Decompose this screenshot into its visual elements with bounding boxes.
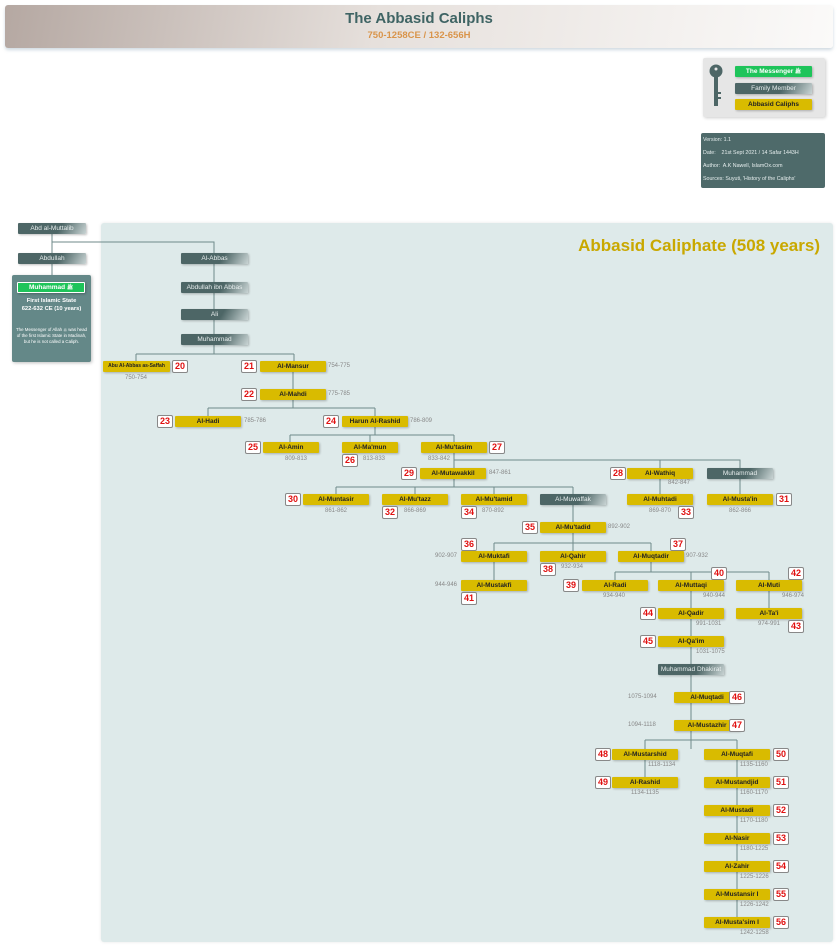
- reign dates: 870-892: [482, 508, 504, 514]
- node: Ali: [181, 309, 248, 320]
- reign dates: 1225-1226: [740, 874, 769, 880]
- reign dates: 934-940: [603, 593, 625, 599]
- number badges: 28: [613, 468, 623, 478]
- caliph boxes: Harun Al-Rashid: [350, 418, 400, 425]
- text: note: The Messenger of Allah ﷺ was head of the first Islamic State in Madinah, but he is not called a Caliph.: [16, 327, 87, 344]
- reign dates: 1160-1170: [740, 790, 768, 796]
- number badges: 21: [244, 361, 254, 371]
- node: Al-Abbas: Al-Abbas: [201, 255, 228, 262]
- reign dates: 786-809: [410, 418, 432, 424]
- legend: messenger: [735, 66, 812, 77]
- number badges: 33: [681, 507, 691, 517]
- reign dates: 946-974: [782, 593, 804, 599]
- legend: family member: Family Member: [751, 85, 796, 92]
- reign dates: 869-870: [649, 508, 671, 514]
- number badges: 24: [326, 416, 336, 426]
- reign dates: 842-847: [668, 480, 690, 486]
- reign dates: 940-944: [703, 593, 725, 599]
- caliph boxes: Al-Mustandjid: [716, 779, 758, 786]
- number badges: 40: [714, 568, 724, 578]
- node: Muhammad: Muhammad: [197, 336, 232, 343]
- caliph boxes: Al-Mansur: [277, 363, 309, 370]
- reign dates: 892-902: [608, 524, 630, 530]
- number badges: 38: [543, 564, 553, 574]
- info box: [701, 133, 825, 188]
- panel: abbasid caliphate: [101, 223, 833, 942]
- reign dates: 750-754: [125, 375, 147, 381]
- caliph boxes: Al-Nasir: [725, 835, 749, 842]
- node: Muhammad (2): [707, 468, 773, 479]
- node: Muhammad: Muhammad ﷺ: [29, 284, 73, 291]
- node: Al-Muwaffak: [540, 494, 606, 505]
- title: The Abbasid Caliphs: [345, 10, 493, 27]
- caliph boxes: Al-Muntasir: [318, 496, 354, 503]
- reign dates: 847-861: [489, 470, 511, 476]
- node: Muhammad Dhakirat: Muhammad Dhakirat: [661, 666, 721, 673]
- caliph boxes: Al-Musta'sim I: [715, 919, 759, 926]
- caliph boxes: Al-Mutawakkil: [431, 470, 475, 477]
- reign dates: 754-775: [328, 363, 350, 369]
- caliph boxes: Al-Mu'tazz: [399, 496, 431, 503]
- subtitle: 750-1258CE / 132-656H: [368, 30, 470, 41]
- caliph boxes: Al-Radi: [604, 582, 626, 589]
- legend: caliphs: [735, 99, 812, 110]
- caliph boxes: Al-Hadi: [197, 418, 219, 425]
- caliph boxes: Al-Muhtadi: [643, 496, 677, 503]
- text: first islamic state: 622-632 CE (10 years): [22, 306, 81, 312]
- number badges: 56: [776, 917, 786, 927]
- legend: family member: [735, 83, 812, 94]
- caliph boxes: Al-Qadir: [678, 610, 704, 617]
- number badges: 30: [288, 494, 298, 504]
- number badges: 34: [464, 507, 474, 517]
- reign dates: 785-786: [244, 418, 266, 424]
- caliph boxes: Al-Mustazhir: [688, 722, 726, 729]
- number badges: 25: [248, 442, 258, 452]
- caliph boxes: Al-Zahir: [725, 863, 749, 870]
- caliph boxes: Al-Mustansir I: [716, 891, 758, 898]
- number badges: 37: [673, 539, 683, 549]
- node: Abdullah: [18, 253, 86, 264]
- number badges: 36: [464, 539, 474, 549]
- number badges: 54: [776, 861, 786, 871]
- reign dates: 1242-1258: [740, 930, 769, 936]
- reign dates: 1170-1180: [740, 818, 768, 824]
- reign dates: 862-866: [729, 508, 751, 514]
- number badges: 29: [404, 468, 414, 478]
- caliph boxes: Abu Al-Abbas as-Saffah: [108, 363, 165, 369]
- node: Muhammad (2): Muhammad: [723, 470, 757, 477]
- caliph boxes: Al-Mahdi: [279, 391, 307, 398]
- number badges: 55: [776, 889, 786, 899]
- caliph boxes: Al-Rashid: [630, 779, 660, 786]
- node: Abd al-Muttalib: Abd al-Muttalib: [30, 225, 74, 232]
- info box: Sources: Suyuti, 'History of the Caliphs': [703, 176, 795, 182]
- caliph boxes: Al-Ta'i: [759, 610, 779, 617]
- caliph boxes: Al-Mustarshid: [623, 751, 667, 758]
- number badges: 47: [732, 720, 742, 730]
- panel heading: Abbasid Caliphate (508 years): [578, 236, 820, 255]
- node: Al-Abbas: [181, 253, 248, 264]
- caliph boxes: Al-Mu'tasim: [436, 444, 472, 451]
- caliph boxes: Al-Muqtafi: [721, 751, 753, 758]
- reign dates: 1118-1134: [648, 762, 675, 768]
- icon: key: [710, 64, 722, 106]
- number badges: 22: [244, 389, 254, 399]
- number badges: 39: [566, 580, 576, 590]
- number badges: 53: [776, 833, 786, 843]
- reign dates: 1075-1094: [628, 694, 657, 700]
- caliph boxes: Al-Amin: [279, 444, 303, 451]
- text: first islamic state: [22, 298, 81, 312]
- info box: Author: A.K Nawell, IslamOx.com: [703, 163, 782, 169]
- node: Al-Muwaffak: Al-Muwaffak: [555, 496, 591, 503]
- caliph boxes: Al-Ma'mun: [354, 444, 386, 451]
- caliph boxes: Al-Qahir: [560, 553, 586, 560]
- node: Ali: Ali: [211, 311, 218, 318]
- reign dates: 907-932: [686, 553, 708, 559]
- number badges: 51: [776, 777, 786, 787]
- number badges: 46: [732, 692, 742, 702]
- number badges: 44: [643, 608, 653, 618]
- number badges: 26: [345, 455, 355, 465]
- number badges: 52: [776, 805, 786, 815]
- caliph boxes: Al-Muqtadir: [633, 553, 669, 560]
- reign dates: 866-869: [404, 508, 426, 514]
- caliph boxes: Al-Muti: [758, 582, 780, 589]
- header banner: [5, 5, 833, 48]
- reign dates: 861-862: [325, 508, 347, 514]
- reign dates: 1094-1118: [628, 722, 656, 728]
- caliph boxes: Al-Muktafi: [478, 553, 510, 560]
- reign dates: 944-946: [435, 582, 457, 588]
- reign dates: 1031-1075: [696, 649, 725, 655]
- number badges: 27: [492, 442, 502, 452]
- number badges: 50: [776, 749, 786, 759]
- legend: messenger: The Messenger ﷺ: [746, 68, 801, 75]
- number badges: 23: [160, 416, 170, 426]
- node: Abd al-Muttalib: [18, 223, 86, 234]
- node: Muhammad: [17, 282, 85, 293]
- caliph boxes: Al-Musta'in: [723, 496, 757, 503]
- reign dates: 902-907: [435, 553, 457, 559]
- reign dates: 974-991: [758, 621, 780, 627]
- reign dates: 1134-1135: [631, 790, 659, 796]
- node: Abdullah: Abdullah: [39, 255, 65, 262]
- reign dates: 1180-1225: [740, 846, 768, 852]
- number badges: 35: [525, 522, 535, 532]
- legend: caliphs: Abbasid Caliphs: [748, 101, 799, 108]
- number badges: 49: [598, 777, 608, 787]
- number badges: 45: [643, 636, 653, 646]
- node: Muhammad: [181, 334, 248, 345]
- node: Abdullah ibn Abbas: [181, 282, 248, 293]
- reign dates: 833-842: [428, 456, 450, 462]
- number badges: 43: [791, 621, 801, 631]
- caliph boxes: Al-Qa'im: [678, 638, 704, 645]
- reign dates: 1226-1242: [740, 902, 769, 908]
- number badges: 32: [385, 507, 395, 517]
- caliph boxes: Al-Mustakfi: [476, 582, 512, 589]
- info box: Date: 21st Sept 2021 / 14 Safar 1443H: [703, 150, 799, 156]
- reign dates: 1135-1160: [740, 762, 768, 768]
- number badges: 31: [779, 494, 789, 504]
- caliph boxes: Al-Mustadi: [720, 807, 754, 814]
- caliph boxes: Al-Muqtadi: [690, 694, 724, 701]
- reign dates: 813-833: [363, 456, 385, 462]
- text: first islamic state: First Islamic State: [27, 298, 76, 304]
- reign dates: 775-785: [328, 391, 350, 397]
- reign dates: 809-813: [285, 456, 307, 462]
- number badges: 41: [464, 593, 474, 603]
- caliph boxes: Al-Wathiq: [645, 470, 675, 477]
- number badges: 20: [175, 361, 185, 371]
- legend: [703, 58, 825, 117]
- reign dates: 932-934: [561, 564, 583, 570]
- panel: Muhammad first Islamic state: [12, 275, 91, 362]
- caliph boxes: Al-Muttaqi: [675, 582, 707, 589]
- node: Abdullah ibn Abbas: Abdullah ibn Abbas: [187, 284, 242, 291]
- number badges: 48: [598, 749, 608, 759]
- caliph boxes: Al-Mu'tadid: [555, 524, 591, 531]
- caliph boxes: Al-Mu'tamid: [476, 496, 512, 503]
- info box: Version: 1.1: [703, 137, 731, 143]
- reign dates: 991-1031: [696, 621, 721, 627]
- node: Muhammad Dhakirat: [658, 664, 724, 675]
- number badges: 42: [791, 568, 801, 578]
